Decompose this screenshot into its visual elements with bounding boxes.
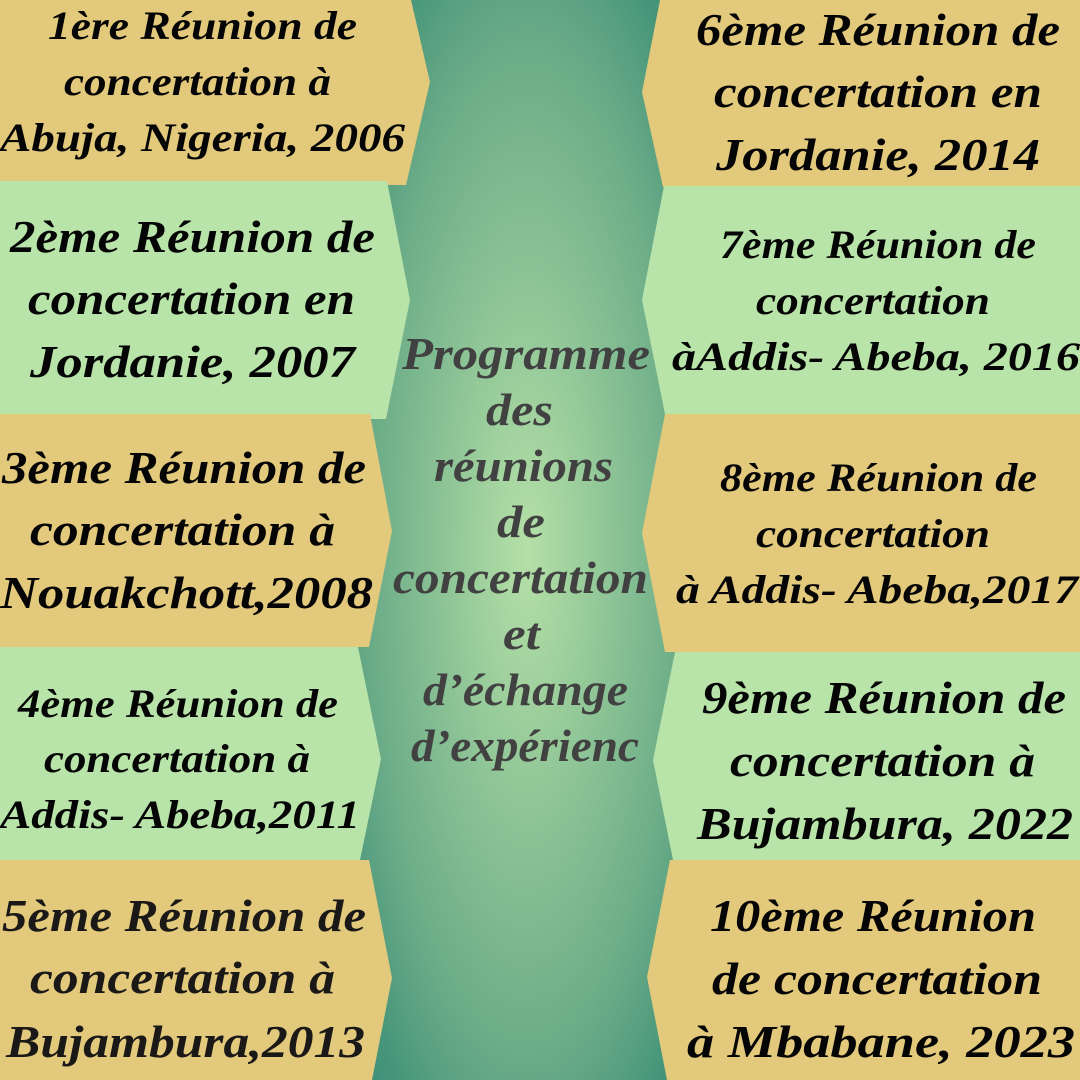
panel: meeting 10: de concertation: [712, 953, 1042, 1004]
panel: meeting 1: [0, 0, 430, 185]
title: central programme heading: [393, 328, 650, 771]
panel: meeting 7: concertation: [756, 278, 990, 323]
title: central programme heading: Programme: [401, 328, 650, 379]
panel: meeting 7: àAddis- Abeba, 2016: [672, 334, 1080, 379]
title: central programme heading: d’échange: [423, 664, 628, 715]
title: central programme heading: des: [486, 384, 553, 435]
panel: meeting 6: [642, 0, 1080, 187]
panel: meeting 10: à Mbabane, 2023: [687, 1016, 1075, 1067]
panel: meeting 10: [647, 860, 1080, 1080]
panel: meeting 3: concertation à: [30, 504, 335, 555]
panel: meeting 8: concertation: [756, 511, 990, 556]
panel: meeting 10: 10ème Réunion: [710, 890, 1036, 941]
panel: meeting 4: Addis- Abeba,2011: [0, 792, 360, 837]
title: central programme heading: concertation: [393, 552, 648, 603]
panel: meeting 2: [0, 181, 410, 419]
title: central programme heading: de: [497, 496, 545, 547]
panel: meeting 5: Bujambura,2013: [5, 1016, 365, 1067]
panel: meeting 3: [0, 414, 392, 647]
panel: meeting 5: concertation à: [30, 952, 335, 1003]
panel: meeting 7: 7ème Réunion de: [720, 222, 1036, 267]
panel: meeting 8: 8ème Réunion de: [720, 455, 1037, 500]
panel: meeting 5: 5ème Réunion de: [2, 890, 366, 941]
panel: meeting 3: Nouakchott,2008: [0, 567, 373, 618]
panel: meeting 9: concertation à: [730, 735, 1035, 786]
panel: meeting 9: Bujambura, 2022: [696, 798, 1073, 849]
panel: meeting 1: concertation à: [64, 59, 331, 104]
panel: meeting 1: Abuja, Nigeria, 2006: [0, 115, 405, 160]
panel: meeting 9: 9ème Réunion de: [702, 672, 1066, 723]
panel: meeting 6: concertation en: [714, 66, 1042, 117]
title: central programme heading: et: [503, 608, 541, 659]
panel: meeting 1: 1ère Réunion de: [48, 3, 357, 48]
panel: meeting 2: Jordanie, 2007: [29, 336, 357, 387]
panel: meeting 2: concertation en: [28, 273, 355, 324]
panel: meeting 8: [642, 414, 1080, 652]
panel: meeting 4: [0, 647, 381, 860]
title: central programme heading: d’expérienc: [411, 720, 639, 771]
panel: meeting 5: [0, 860, 392, 1080]
panel: meeting 8: à Addis- Abeba,2017: [676, 567, 1080, 612]
panel: meeting 7: [642, 186, 1080, 414]
panel: meeting 6: Jordanie, 2014: [715, 129, 1040, 180]
panel: meeting 6: 6ème Réunion de: [696, 4, 1060, 55]
panel: meeting 9: [653, 652, 1080, 860]
title: central programme heading: réunions: [434, 440, 613, 491]
panel: meeting 2: 2ème Réunion de: [9, 211, 375, 262]
panel: meeting 4: 4ème Réunion de: [17, 681, 338, 726]
panel: meeting 4: concertation à: [44, 736, 310, 781]
panel: meeting 3: 3ème Réunion de: [1, 442, 366, 493]
